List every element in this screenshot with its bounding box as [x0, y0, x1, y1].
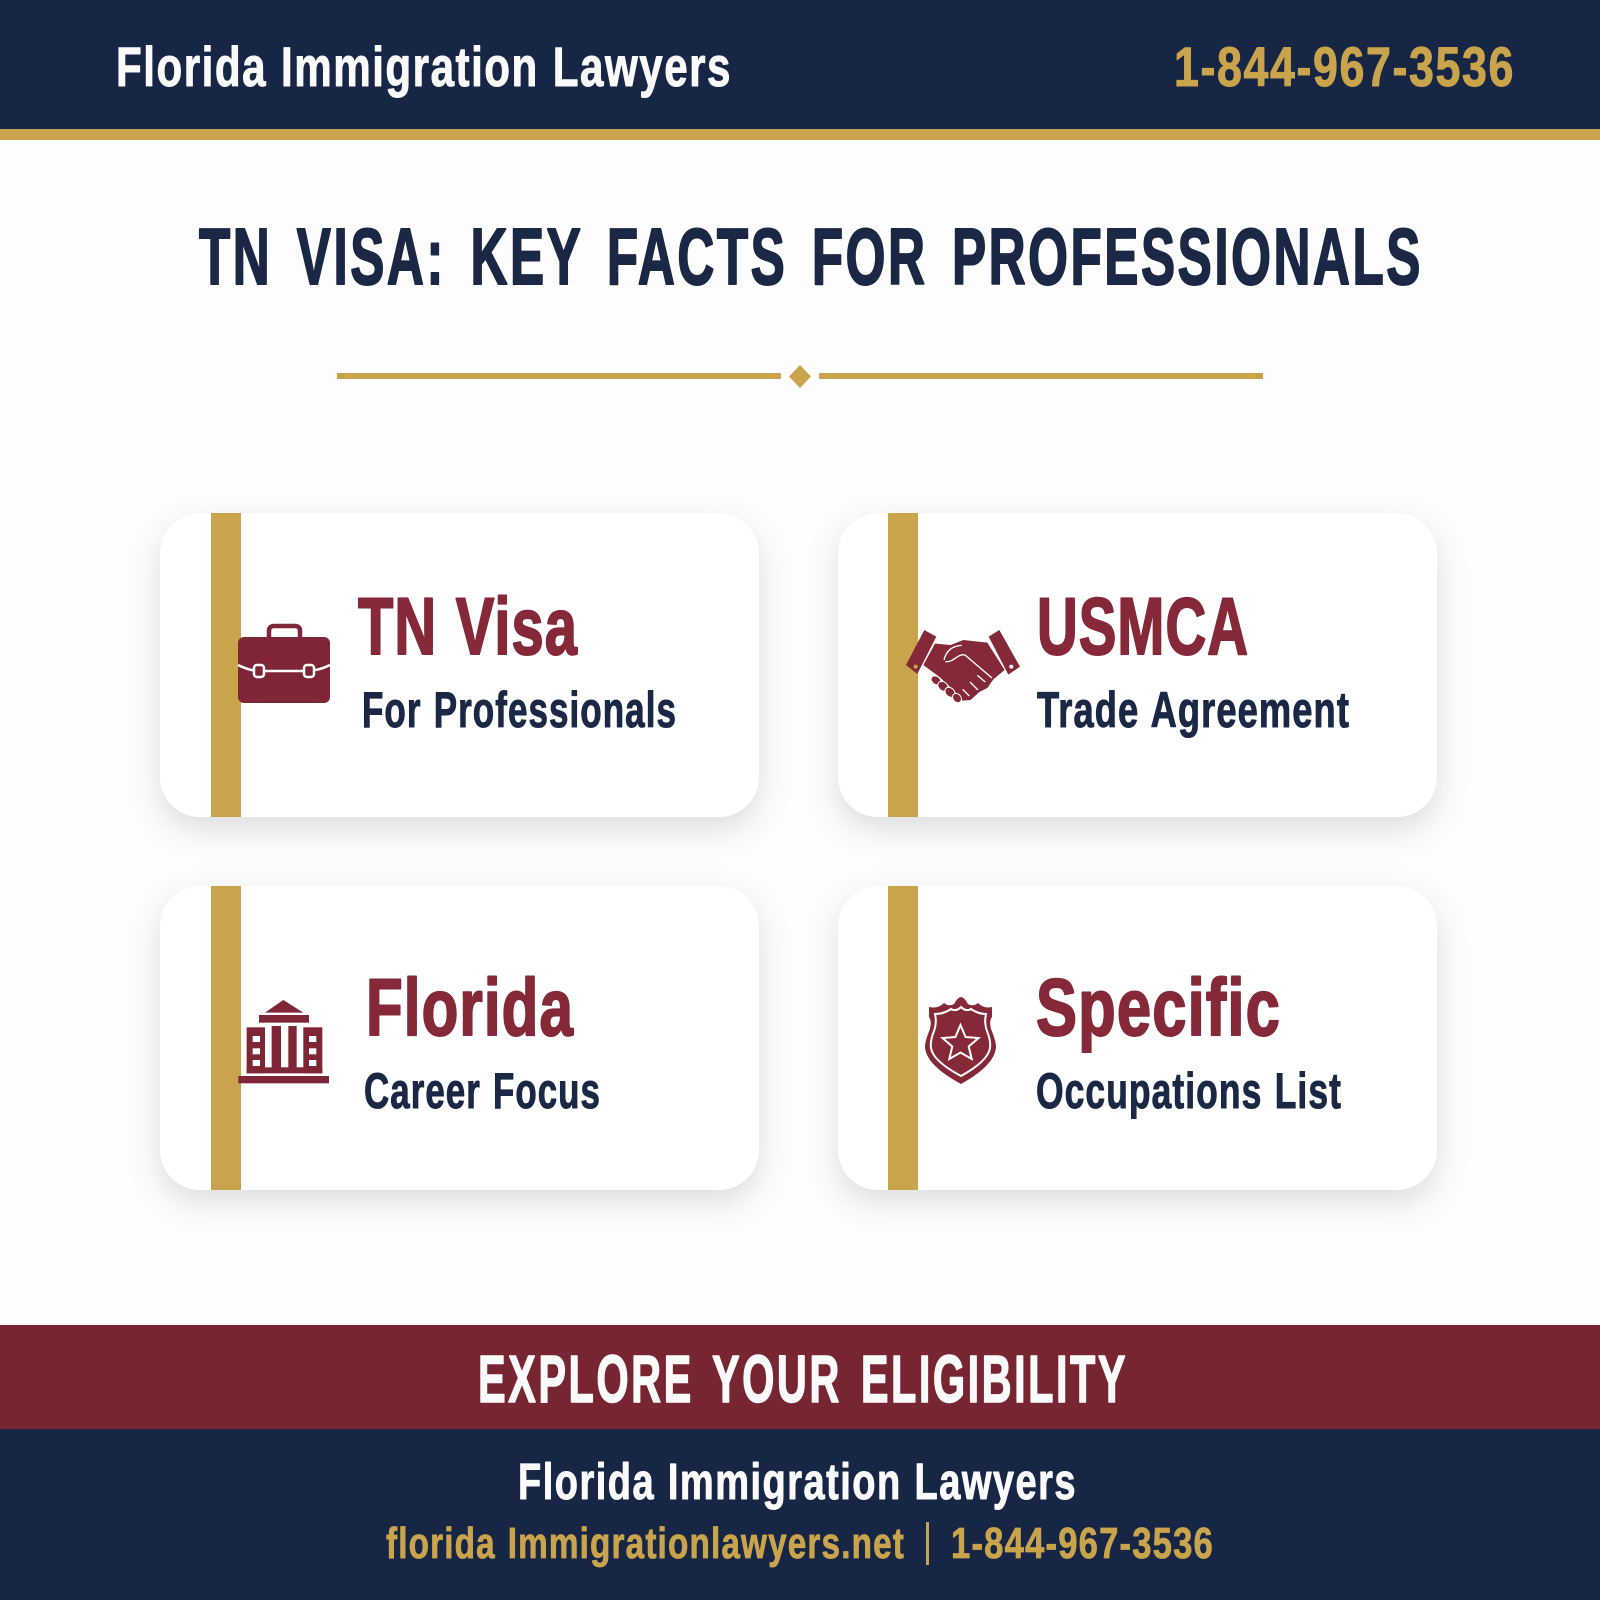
card subheading: For Professionals: For Professionals	[362, 682, 677, 738]
footer separator	[926, 1522, 929, 1565]
card subheading: Trade Agreement: Trade Agreement	[1037, 682, 1350, 738]
icon: shield badge	[925, 997, 996, 1084]
card heading: USMCA: USMCA	[1037, 582, 1249, 672]
panel: Specific	[838, 886, 1437, 1190]
header phone number: 1-844-967-3536	[1174, 35, 1515, 98]
footer phone number: 1-844-967-3536	[951, 1519, 1214, 1568]
icon: government building	[238, 1000, 329, 1083]
card subheading: Occupations List: Occupations List	[1036, 1063, 1342, 1119]
panel: TN Visa	[160, 513, 759, 817]
card heading: TN Visa: TN Visa	[358, 582, 578, 672]
footer website: florida Immigrationlawyers.net	[386, 1519, 905, 1568]
icon: handshake	[906, 630, 1020, 704]
call to action band	[0, 1325, 1600, 1429]
footer firm name: Florida Immigration Lawyers	[518, 1453, 1077, 1510]
header firm name: Florida Immigration Lawyers	[116, 35, 732, 98]
panel: USMCA	[838, 513, 1437, 817]
card heading: Specific: Specific	[1036, 963, 1281, 1053]
icon: briefcase	[238, 626, 330, 703]
card subheading: Career Focus: Career Focus	[364, 1063, 601, 1119]
card heading: Florida: Florida	[366, 963, 574, 1053]
header bar	[0, 0, 1600, 140]
footer	[0, 1429, 1600, 1600]
call to action text: EXPLORE YOUR ELIGIBILITY	[478, 1342, 1128, 1417]
title divider with diamond	[337, 365, 1263, 388]
panel: Florida	[160, 886, 759, 1190]
